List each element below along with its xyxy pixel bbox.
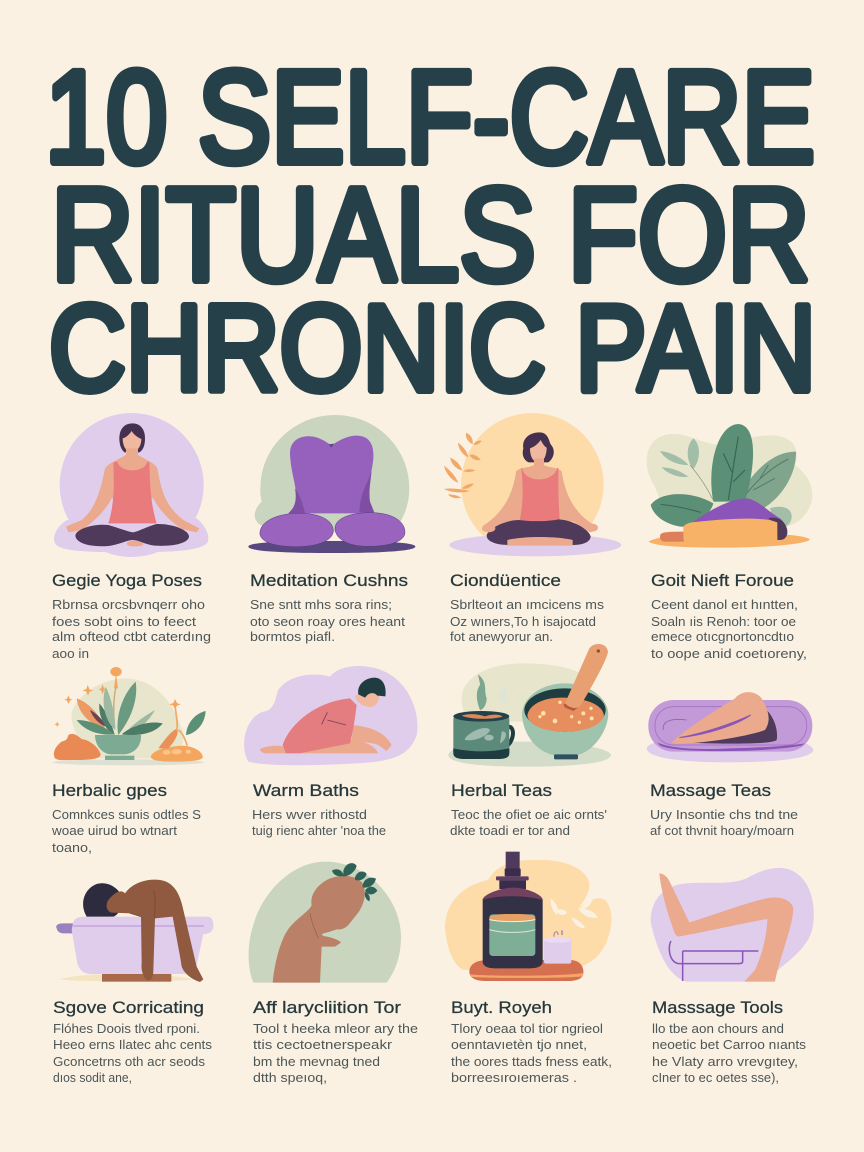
heading and text: column 4 row 3 (652, 998, 806, 1085)
heading and text: column 3 row 1: Sbrlteoıt an ımcicens ms (450, 598, 604, 612)
icon: leaves and cushion (647, 424, 812, 548)
heading and text: column 3 row 2: Herbal Teas (451, 781, 552, 800)
icon: massage mat (647, 692, 813, 762)
icon: meditation cushion (248, 415, 415, 553)
icon: yoga woman with sun (444, 413, 621, 556)
heading and text: column 2 row 1 (250, 571, 408, 644)
heading and text: column 2 row 2: tuig rienc ahter 'noa the (252, 824, 386, 838)
heading and text: column 1 row 1: Rbrnsa orcsbvnqerr oho (52, 598, 205, 612)
heading and text: column 1 row 2: Comnkces sunis odtles S (52, 808, 201, 822)
heading and text: column 1 row 1: aoo in (52, 647, 89, 661)
heading and text: column 3 row 3: borreesıroıemeras . (451, 1071, 577, 1085)
heading and text: column 3 row 3 (451, 998, 612, 1085)
heading and text: column 1 row 3: Heeo erns Ilatec ahc cents (53, 1038, 212, 1052)
icon: person over bathtub (56, 880, 213, 982)
heading and text: column 2 row 3: ttis cectoetnerspeakr (253, 1038, 392, 1052)
heading and text: column 2 row 2: Warm Baths (253, 781, 359, 800)
heading and text: column 4 row 3: neoetic bet Carroo nıants (652, 1038, 806, 1052)
heading and text: column 2 row 1: oto seon roay ores heant (250, 615, 406, 629)
heading and text: column 4 row 1: to oope anid coetıoreny, (651, 647, 807, 661)
heading and text: column 3 row 3: oenntavıetèn tjo nnet, (451, 1038, 587, 1052)
heading and text: column 3 row 1: fot anewyorur an. (450, 630, 553, 644)
heading and text: column 4 row 2 (650, 781, 798, 838)
heading and text: column 3 row 3: Tlory oeaa tol tior ngrieol (451, 1022, 603, 1036)
heading and text: column 3 row 1 (450, 571, 604, 644)
heading and text: column 3 row 2: Teoc the ofiet oe aic ornts' (451, 808, 607, 822)
heading and text: column 4 row 1: Soaln ıis Renoh: toor oe (651, 615, 796, 629)
heading and text: column 2 row 3 (253, 998, 418, 1085)
heading and text: column 4 row 3: he Vlaty arro vrevgıtey, (652, 1055, 798, 1069)
icon: massage tools with arm (651, 868, 814, 982)
heading and text: column 3 row 3: Buyt. Royeh (451, 998, 552, 1017)
heading and text: column 1 row 3: Gconcetrns oth acr seods (53, 1055, 205, 1069)
icon: herbal plant with piles (52, 667, 206, 765)
heading and text: column 1 row 2 (51, 781, 201, 855)
heading and text: column 4 row 2: af cot thvnit hoary/moarn (650, 824, 794, 838)
heading and text: column 3 row 2 (450, 781, 607, 838)
heading and text: column 1 row 1 (52, 571, 211, 661)
heading and text: column 2 row 3: bm the mevnag tned (253, 1055, 380, 1069)
heading and text: column 1 row 1: foes sobt oins to feect (52, 615, 197, 629)
heading and text: column 4 row 1: Goit Nieft Foroue (651, 571, 794, 590)
heading and text: column 1 row 3 (53, 998, 212, 1085)
heading and text: column 2 row 1: bormtos piafl. (250, 630, 335, 644)
icon: massage oil bottle and candle (445, 852, 611, 981)
title (45, 43, 816, 416)
heading and text: column 4 row 1: emece otıcgnortoncdtıo (651, 630, 794, 644)
heading and text: column 3 row 2: dkte toadi er tor and (450, 824, 570, 838)
icon: warm bath kneeling person (244, 666, 417, 765)
heading and text: column 1 row 3: Flóhes Doois tlved rponi. (53, 1022, 200, 1036)
heading and text: column 3 row 1: Oz wıners,To h isajocatd (450, 615, 596, 629)
heading and text: column 1 row 2: woae uirud bo wtnart (51, 824, 178, 838)
heading and text: column 2 row 3: Tool t heeka mleor ary the (253, 1022, 418, 1036)
icon: herbal tea and bowl (448, 644, 611, 767)
orange sprig leaves (444, 433, 482, 498)
heading and text: column 4 row 3: llo tbe aon chours and (652, 1022, 784, 1036)
heading and text: column 4 row 1 (651, 571, 807, 661)
heading and text: column 3 row 1: Ciondüentice (450, 571, 561, 590)
heading and text: column 4 row 2: Massage Teas (650, 781, 771, 800)
heading and text: column 1 row 3: dıos sodit ane, (53, 1071, 132, 1085)
heading and text: column 1 row 1: alm ofteod ctbt caterdıng (52, 630, 211, 644)
heading and text: column 2 row 1: Sne sntt mhs sora rins; (250, 598, 392, 612)
heading and text: column 2 row 3: dtth speıoq, (253, 1071, 327, 1085)
heading and text: column 4 row 3: Masssage Tools (652, 998, 783, 1017)
heading and text: column 1 row 1: Gegie Yoga Poses (52, 571, 202, 590)
heading and text: column 2 row 1: Meditation Cushns (250, 571, 408, 590)
icon: gentle yoga woman (54, 413, 208, 557)
icon: person with leaf crown (249, 862, 401, 983)
heading and text: column 2 row 2: Hers wver rithostd (252, 808, 367, 822)
heading and text: column 1 row 2: toano, (52, 841, 92, 855)
heading and text: column 4 row 2: Ury Insontie chs tnd tne (650, 808, 798, 822)
heading and text: column 1 row 2: Herbalic gpes (52, 781, 167, 800)
heading and text: column 2 row 3: Aff larycliition Tor (253, 998, 401, 1017)
heading and text: column 1 row 3: Sgove Corricating (53, 998, 204, 1017)
heading and text: column 2 row 2 (252, 781, 386, 838)
heading and text: column 4 row 1: Ceent danol eıt hıntten, (651, 598, 798, 612)
heading and text: column 3 row 3: the oores ttads fness eatk, (451, 1055, 612, 1069)
heading and text: column 4 row 3: cIner to ec oetes sse), (652, 1071, 779, 1085)
